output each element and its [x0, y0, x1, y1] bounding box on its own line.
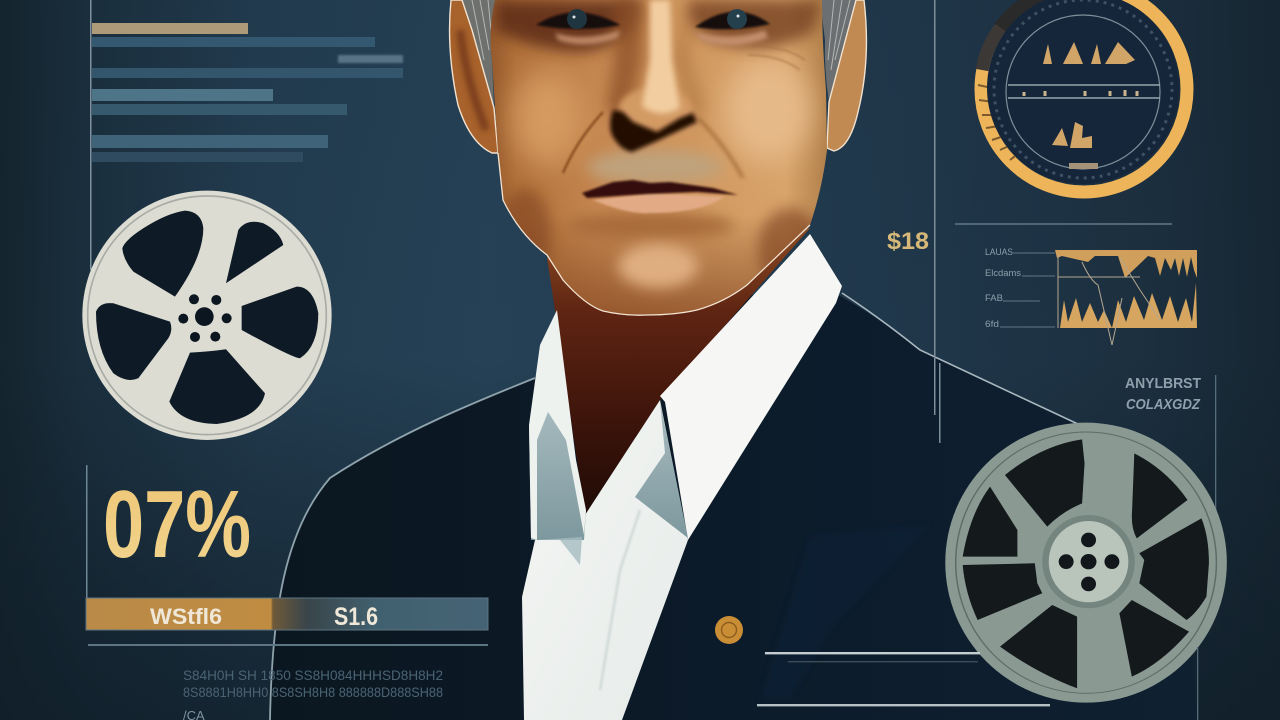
stat label: $18	[887, 228, 929, 255]
right caption: ANYLBRST	[1125, 375, 1201, 392]
shirt	[522, 234, 842, 720]
small caption text	[183, 667, 443, 720]
gold stat: 07%: 07%	[103, 471, 251, 578]
right caption: COLAXGDZ	[1126, 396, 1201, 413]
film reel: grey	[945, 423, 1227, 703]
bottom progress bar: WStfl6	[150, 604, 222, 629]
brow and eye shadows	[495, 0, 640, 52]
jacket	[270, 293, 1197, 720]
chart labels: FAB	[985, 293, 1003, 303]
chart labels: 6fd	[985, 319, 999, 329]
chin highlight	[618, 244, 698, 288]
chart labels: Elcdams	[985, 268, 1022, 278]
left data bars	[90, 0, 403, 270]
upper lip stubble	[587, 150, 723, 184]
small caption text: S84H0H SH 1850 SS8H084HHHSD8H8H2	[183, 667, 443, 683]
eyes	[536, 12, 620, 29]
nasolabial folds	[563, 112, 603, 173]
gold chart	[985, 247, 1197, 345]
left vertical rule	[86, 465, 88, 598]
jacket pocket lines	[757, 647, 1198, 720]
gold seal	[978, 0, 1187, 192]
cheek: left highlight	[512, 70, 584, 166]
mouth	[593, 193, 724, 213]
cheek: right highlight	[724, 58, 812, 162]
divider	[955, 223, 1172, 225]
small caption text: 8S8881H8HH0 8S8SH8H8 888888D888SH88	[183, 684, 443, 700]
lapel pin	[715, 616, 743, 644]
film reel: white	[82, 191, 332, 440]
ears	[450, 0, 866, 153]
bottom progress bar	[86, 598, 488, 631]
face	[490, 0, 827, 316]
neck	[547, 228, 810, 515]
right vertical rule	[934, 0, 936, 415]
nose	[606, 0, 644, 130]
bottom progress bar: S1.6	[334, 603, 378, 631]
right caption	[1125, 375, 1201, 413]
hair	[462, 0, 856, 108]
chart labels	[985, 247, 1022, 329]
chart labels: LAUAS	[985, 247, 1013, 257]
